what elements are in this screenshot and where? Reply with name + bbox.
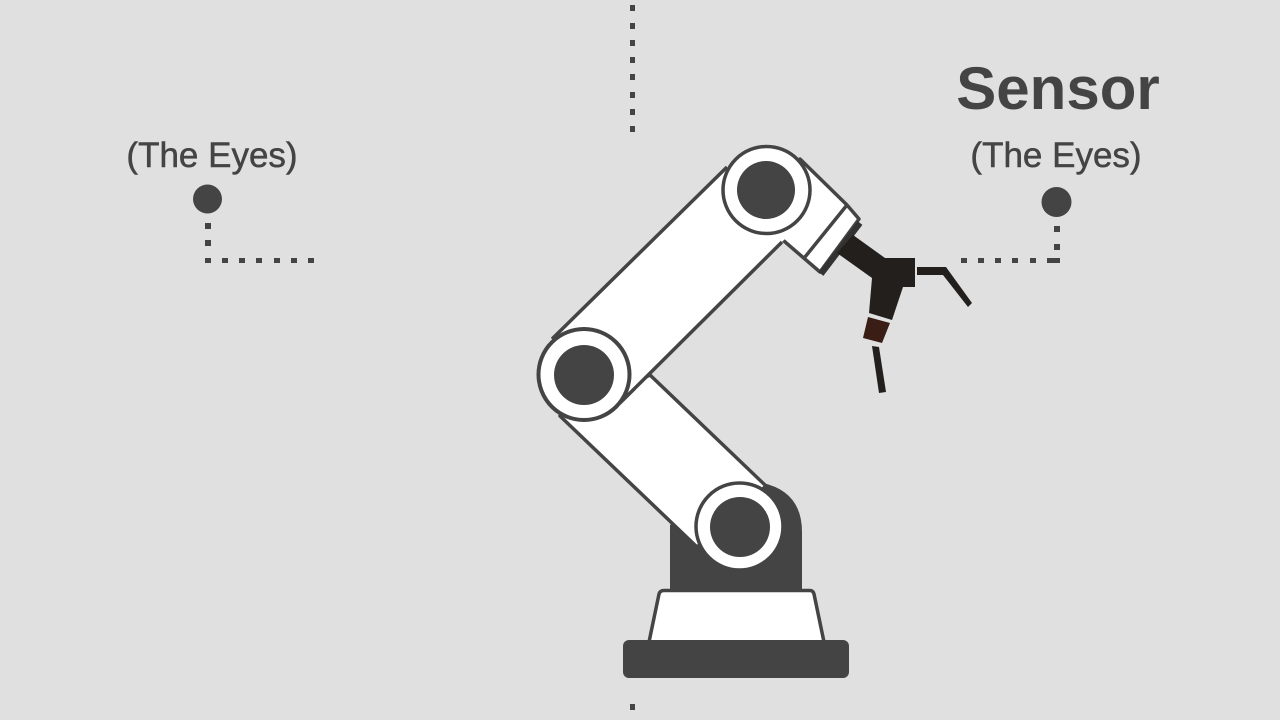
- gripper body: [837, 235, 915, 320]
- right marker dot: [1042, 187, 1072, 217]
- gripper left finger: [872, 346, 886, 393]
- dotted guide: bottom centre: [630, 704, 635, 710]
- base pedestal: [670, 483, 802, 594]
- wrist housing: [777, 159, 860, 274]
- upper arm edges: [552, 167, 782, 403]
- top joint: [723, 146, 810, 234]
- lower arm link: [560, 375, 766, 547]
- left label: the eyes: (The Eyes): [126, 136, 298, 175]
- gripper right finger: [917, 267, 972, 307]
- wrist dark edge: [821, 223, 860, 274]
- base collar: [649, 590, 824, 642]
- wrist divider line: [805, 205, 847, 257]
- middle joint: [538, 329, 630, 420]
- right heading: sensor: Sensor: [956, 55, 1160, 122]
- left marker dot: [193, 184, 222, 214]
- base plate: [623, 640, 849, 678]
- robot arm: [538, 146, 972, 678]
- right label: the eyes: (The Eyes): [970, 136, 1142, 175]
- upper arm link: [548, 166, 790, 404]
- left dotted connector: [205, 223, 314, 263]
- bottom joint: [696, 483, 783, 570]
- right dotted connector: [961, 226, 1060, 263]
- gripper brown sensor segment: [863, 317, 890, 343]
- dotted guide: top centre: [630, 5, 635, 132]
